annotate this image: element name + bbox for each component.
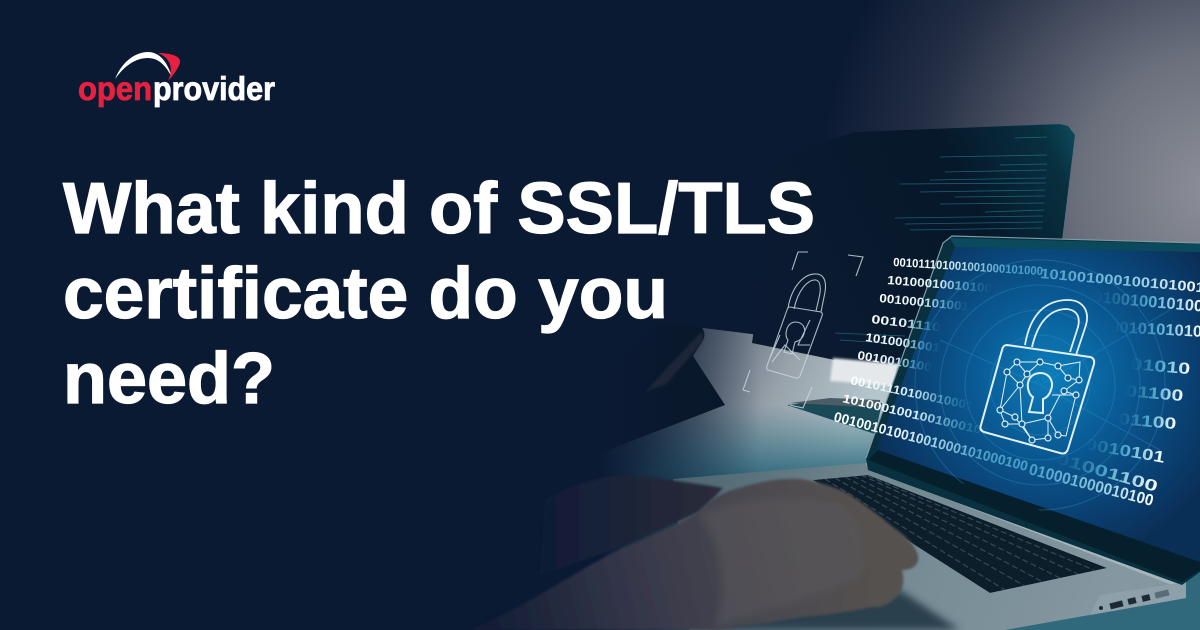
monitor code lines: [835, 137, 1047, 344]
background monitor: [752, 124, 1075, 380]
laptop keyboard: [813, 475, 1107, 593]
laptop lid and screen: [832, 236, 1200, 585]
binary rows fading in on the right: 01100: [1118, 411, 1177, 433]
screen padlock: [980, 300, 1094, 454]
binary rows fading out on the left: 00101110: [871, 312, 942, 335]
desk surface: [590, 320, 1200, 630]
heading: need?: [63, 339, 275, 419]
binary rows fading in on the right: 0010101010: [1110, 319, 1200, 341]
heading: What kind of SSL/TLS: [63, 169, 815, 249]
logo arc: [115, 52, 180, 81]
logo: openprovider: [78, 52, 275, 107]
screen target rings: [915, 260, 1170, 510]
binary rows fading out on the left: 001000101001: [879, 291, 970, 314]
binary rows fading out on the left: 0010010100: [857, 348, 933, 374]
front hand and arm: [470, 479, 918, 630]
tablet on stand: [530, 322, 725, 470]
binary rows: [832, 255, 1200, 510]
binary rows fading out on the left: 1010001001001000100: [841, 391, 991, 439]
padlock circuit network: [1000, 362, 1080, 440]
binary rows fading out on the left: 1010001001: [865, 330, 941, 355]
heading: [63, 169, 815, 419]
binary rows fading in on the right: 010010010100: [1093, 289, 1200, 316]
laptop base: [673, 463, 1186, 630]
binary rows fading out on the left: [841, 273, 993, 439]
desk paper and small laptop behind: [787, 358, 900, 434]
grey wall: [780, 0, 1200, 630]
binary rows fading in on the right: 0010101: [1084, 436, 1166, 467]
binary row 1: 101001000100101001: [1040, 265, 1200, 295]
binary rows fading out on the left: 10100010010100: [887, 273, 993, 295]
logo: openprovider: provider: [153, 70, 275, 107]
heading: certificate do you: [63, 254, 668, 334]
monitor padlock hologram: [743, 252, 863, 408]
back hand: [540, 475, 723, 575]
binary rows fading in on the right: 01001100: [1054, 451, 1160, 496]
binary row 9: 00100101001001000101000100: [832, 408, 1030, 474]
binary rows fading out on the left: 00101110100010001: [849, 373, 975, 413]
binary rows fading in on the right: 01010: [1130, 356, 1191, 378]
binary row 1: 001011101001001000101000: [893, 255, 1044, 278]
binary rows fading in on the right: 01100: [1125, 383, 1184, 405]
laptop ports: [1099, 589, 1170, 610]
logo wordmark: open: [78, 70, 152, 107]
binary rows fading in on the right: [1054, 289, 1200, 496]
binary rows: 010001000010100: [1027, 461, 1155, 510]
binary row 1: [893, 255, 1200, 295]
